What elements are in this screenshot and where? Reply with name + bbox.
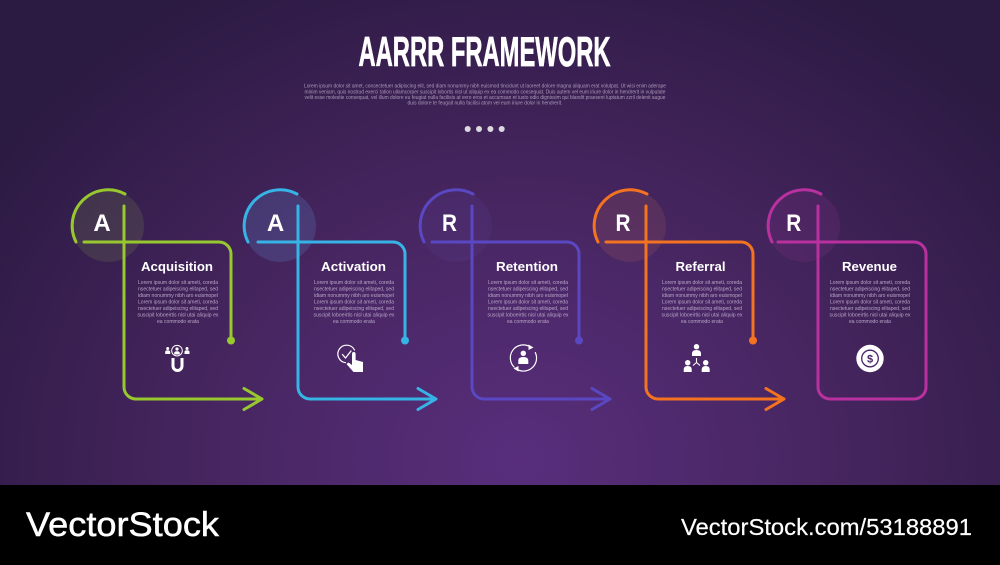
body text — [488, 280, 569, 325]
body text: Lorem ipsum dolor sit ameti, coreda — [830, 300, 910, 306]
body text: Lorem ipsum dolor sit ameti, coreda — [488, 300, 568, 306]
badge circle — [768, 190, 840, 262]
badge letter: R — [786, 210, 801, 237]
heading: Referral — [676, 259, 726, 274]
intro text block: Lorem ipsum dolor sit amet, consectetuer adipiscing elit, sed diam nonummy nibh euismod tincidunt ut laoreet dolore magna aliquam erat volutpat. Ut wisi enim aderape — [304, 84, 666, 90]
body text: Lorem ipsum dolor sit ameti, coreda — [138, 300, 218, 306]
intro text block: duis dolore te feugait nulla facilisi atom vel eum iriure dolor in hendrerit. — [408, 101, 562, 107]
badge letter: A — [93, 210, 111, 237]
top connector line with end dot — [432, 242, 579, 340]
body text — [138, 280, 219, 325]
badge circle — [72, 190, 144, 262]
badge letter: A — [267, 210, 284, 237]
body text: nsectetuer adipeiscing elitaped, sed — [138, 306, 218, 312]
badge circle — [244, 190, 316, 262]
heading: Activation — [321, 259, 386, 274]
body text: suscipit loboeirtis nisl utai aliquip ex — [314, 312, 395, 318]
body text: ea commodo erata — [507, 319, 549, 325]
icon: hand tapping check mark — [338, 345, 363, 372]
body text — [314, 280, 395, 325]
badge circle — [594, 190, 666, 262]
body text: ea commodo erata — [849, 319, 891, 325]
body text: Lorem ipsum dolor sit ameti, coreda — [314, 300, 394, 306]
body text: idiam nonummy nibh aro euismopel — [662, 293, 742, 299]
watermark band — [0, 485, 1000, 565]
body text — [662, 280, 743, 325]
body text: idiam nonummy nibh aro euismopel — [138, 293, 218, 299]
body text: Lorem ipsum dolor sit ameti, coreda — [662, 280, 742, 286]
body text: Lorem ipsum dolor sit ameti, coreda — [662, 300, 742, 306]
watermark url: VectorStock.com/53188891 — [681, 514, 972, 540]
body text: ea commodo erata — [681, 319, 723, 325]
body text: idiam nonummy nibh aro euismopel — [314, 293, 394, 299]
badge arc — [420, 190, 473, 242]
rounded card outline — [778, 206, 926, 399]
top connector line with end dot — [84, 242, 231, 340]
body text: suscipit loboeirtis nisl utai aliquip ex — [830, 312, 911, 318]
body text: idiam nonummy nibh aro euismopel — [830, 293, 910, 299]
body text: suscipit loboeirtis nisl utai aliquip ex — [488, 312, 569, 318]
body text: nsectetuer adipeiscing elitaped, sed — [314, 286, 394, 292]
watermark logo: VectorStock — [26, 506, 220, 544]
body text: nsectetuer adipeiscing elitaped, sed — [138, 286, 218, 292]
badge letter: R — [442, 210, 457, 237]
body text: nsectetuer adipeiscing elitaped, sed — [488, 286, 568, 292]
heading: Acquisition — [141, 259, 213, 274]
icon: dollar coin: $ — [867, 354, 873, 366]
body text: ea commodo erata — [333, 319, 375, 325]
panel: revenue — [768, 190, 926, 399]
panel: retention — [420, 190, 610, 410]
icon: dollar coin — [856, 345, 884, 372]
badge arc — [244, 190, 297, 242]
badge arc — [72, 190, 125, 242]
icon: person in refresh cycle — [510, 344, 537, 372]
title: AARRR FRAMEWORK — [358, 28, 610, 75]
body text: idiam nonummy nibh aro euismopel — [488, 293, 568, 299]
arrow — [646, 206, 784, 410]
body text: Lorem ipsum dolor sit ameti, coreda — [138, 280, 218, 286]
panel: acquisition — [72, 190, 262, 410]
panel: referral — [594, 190, 784, 410]
body text: nsectetuer adipeiscing elitaped, sed — [830, 306, 910, 312]
panel: activation — [244, 190, 436, 410]
body text — [830, 280, 911, 325]
badge arc — [768, 190, 821, 242]
arrow — [472, 206, 610, 410]
intro text block — [304, 84, 666, 107]
top connector line with end dot — [606, 242, 753, 340]
intro text block: minim veniam, quis nostrud exerci tation ullamcorper suscipit lobortis nisl ut aliquip ex ea commodo consequat. Duis autem vel eum iriure dolor in hendrerit in vulputate — [304, 89, 666, 95]
heading: Revenue — [842, 259, 897, 274]
badge circle — [420, 190, 492, 262]
arrow — [298, 206, 436, 410]
intro text block: velit esse molestie consequat, vel illum dolore eu feugiat nulla facilisis at vero eros et accumsan et iusto odio dignissim qui blandit praesent luptatum zzril delenit augue — [304, 95, 666, 101]
body text: Lorem ipsum dolor sit ameti, coreda — [314, 280, 394, 286]
icon: magnet attracting people — [165, 345, 190, 372]
badge letter: R — [616, 210, 630, 237]
body text: nsectetuer adipeiscing elitaped, sed — [662, 306, 742, 312]
body text: Lorem ipsum dolor sit ameti, coreda — [488, 280, 568, 286]
heading: Retention — [496, 259, 558, 274]
badge arc — [594, 190, 647, 242]
pagination dots — [465, 126, 505, 132]
body text: nsectetuer adipeiscing elitaped, sed — [314, 306, 394, 312]
body text: nsectetuer adipeiscing elitaped, sed — [830, 286, 910, 292]
top connector line with end dot — [258, 242, 405, 340]
body text: suscipit loboeirtis nisl utai aliquip ex — [138, 312, 219, 318]
icon: three people network — [684, 344, 710, 372]
body text: Lorem ipsum dolor sit ameti, coreda — [830, 280, 910, 286]
body text: ea commodo erata — [157, 319, 199, 325]
body text: nsectetuer adipeiscing elitaped, sed — [488, 306, 568, 312]
body text: nsectetuer adipeiscing elitaped, sed — [662, 286, 742, 292]
body text: suscipit loboeirtis nisl utai aliquip ex — [662, 312, 743, 318]
arrow — [124, 206, 262, 410]
